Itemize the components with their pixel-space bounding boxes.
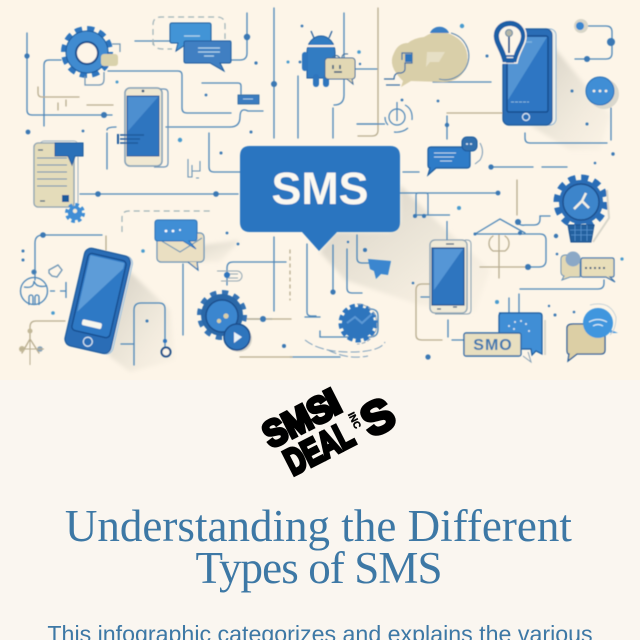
dashed outlines xyxy=(122,17,225,232)
icon: SMO badge and bubble xyxy=(464,313,545,362)
SMO label: SMO xyxy=(473,337,513,354)
circuit nodes xyxy=(22,25,615,360)
icon: small gear xyxy=(68,206,82,220)
icon: lightbulb xyxy=(493,20,526,63)
icon: gear right xyxy=(557,178,609,242)
logo: INC: INC xyxy=(345,411,363,431)
logo line: SMS: SMS xyxy=(256,387,339,456)
icon: message bubble right of sms xyxy=(428,137,482,175)
logo: SMS Deals Inc xyxy=(256,363,403,490)
icon: target dial xyxy=(357,102,412,132)
icon: small blue ribbon xyxy=(368,259,391,279)
icon: document with tag xyxy=(34,141,83,207)
icon: smartphone top right xyxy=(503,29,556,125)
icon: wifi chat bubbles xyxy=(567,304,618,361)
title: Understanding the Different xyxy=(65,501,572,551)
logo line: DEAL: DEAL xyxy=(278,414,360,483)
icon: wiring glyph xyxy=(188,159,200,178)
icon: android robot xyxy=(302,31,338,87)
icon: robot tag xyxy=(325,54,355,84)
logo bar xyxy=(322,387,343,416)
illustration background xyxy=(0,0,640,380)
icon: chat dots circle xyxy=(586,77,619,109)
icon: beige speech blob xyxy=(384,27,469,87)
speech bubble: SMS xyxy=(240,146,400,251)
illustration artwork xyxy=(19,8,624,365)
icon: big tilted phone xyxy=(64,247,134,355)
icon: chat bubbles top xyxy=(170,23,231,71)
icon: envelope with chat xyxy=(155,220,204,270)
logo letter: S: S xyxy=(352,387,403,447)
icon: ring gear bottom centre xyxy=(305,304,385,357)
icon: mid right chat bubbles xyxy=(561,252,615,282)
icon: circuit circle left xyxy=(20,265,66,305)
icon: top right node xyxy=(574,19,588,33)
circuit lines xyxy=(27,8,612,365)
icon: gear top left xyxy=(64,29,120,85)
icon: phone bottom right centre xyxy=(430,240,471,314)
icon: small blue tab xyxy=(238,95,259,104)
icon: small connector xyxy=(413,193,450,240)
long shadows xyxy=(108,45,610,372)
icon: gear with play button xyxy=(200,293,252,352)
icon: lamp node xyxy=(474,219,522,236)
title: Types of SMS xyxy=(196,543,442,593)
icon: phone centre left xyxy=(118,88,168,167)
icon: ring hook xyxy=(162,339,170,356)
icon: tree connector xyxy=(19,328,44,365)
SMS label: SMS xyxy=(272,163,368,214)
icon: paperclip tag xyxy=(217,271,242,281)
tan circuit lines xyxy=(22,8,527,357)
page background xyxy=(0,380,640,640)
